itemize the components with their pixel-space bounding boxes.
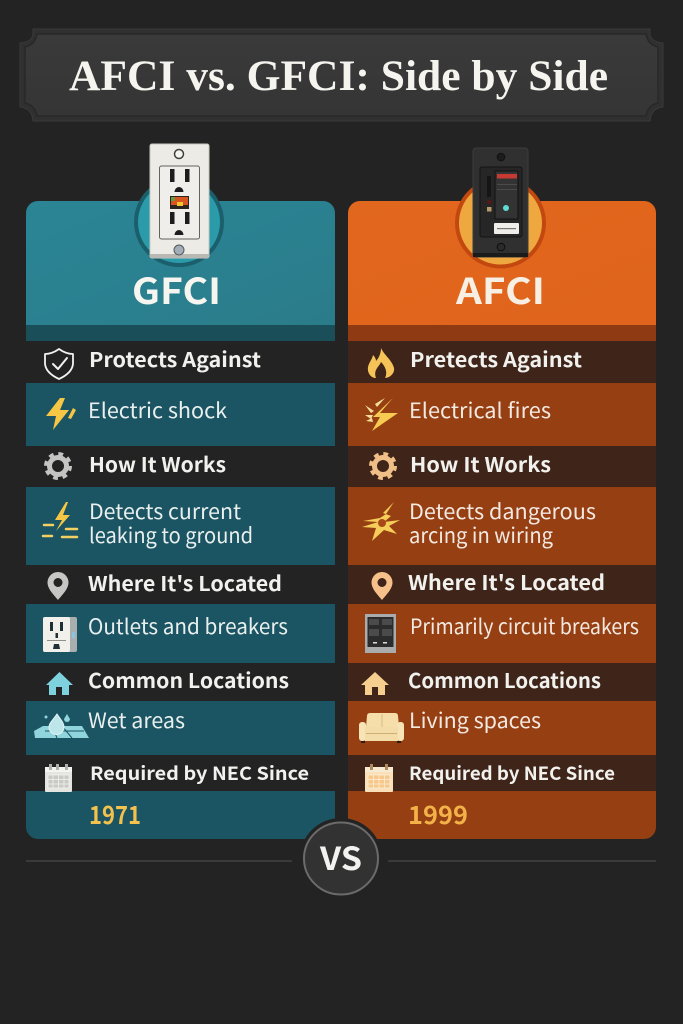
divider line right: [388, 860, 656, 862]
title: AFCI vs. GFCI: Side by Side: [69, 53, 608, 100]
row label: Where It's Located: Where It's Located: [408, 566, 605, 596]
icon: gear: [371, 454, 395, 478]
icon: location pin: [48, 572, 68, 600]
row label: Required by NEC Since: Required by NEC Since: [90, 760, 309, 786]
divider line left: [26, 860, 292, 862]
row text: Outlets and breakers: Outlets and breakers: [88, 611, 288, 641]
icon: AFCI device badge: [457, 148, 544, 266]
icon: location pin: [372, 572, 392, 600]
title plaque: [20, 29, 663, 121]
icon: lightning bolt: [46, 398, 76, 430]
panel: AFCI: [348, 148, 656, 839]
year: 1999: 1999: [408, 796, 468, 832]
heading: AFCI: AFCI: [455, 263, 545, 315]
row text: Detects dangerous arcing in wiring: arcing in wiring: [409, 520, 553, 550]
row label: How It Works: How It Works: [89, 448, 226, 478]
icon: leaking current: [43, 502, 77, 537]
row label: Required by NEC Since: Required by NEC Since: [409, 760, 615, 786]
row text: Detects current leaking to ground: leaking to ground: [89, 520, 253, 550]
row text: Detects current leaking to ground: Detects current: [89, 496, 241, 526]
icon: shield: [45, 349, 73, 379]
row text: Wet areas: Wet areas: [88, 705, 185, 735]
icon: calendar: [45, 764, 72, 792]
icon: breaker panel: [365, 614, 396, 653]
icon: calendar: [365, 764, 393, 792]
icon: sofa: [359, 713, 404, 743]
icon: house: [361, 672, 389, 695]
row text: Detects dangerous arcing in wiring: Detects dangerous: [409, 496, 596, 526]
panel: GFCI: [26, 144, 335, 839]
row text: Electric shock: Electric shock: [88, 395, 227, 425]
icon: outlet: [43, 617, 77, 652]
row label: Common Locations: Common Locations: [408, 664, 601, 694]
row text: Primarily circuit breakers: Primarily circuit breakers: [410, 611, 639, 641]
row text: Electrical fires: Electrical fires: [409, 395, 551, 425]
row text: Living spaces: Living spaces: [409, 705, 541, 735]
VS badge: [300, 818, 382, 898]
icon: flame: [368, 348, 394, 378]
icon: arcing wires: [362, 502, 400, 541]
icon: GFCI outlet badge: [136, 144, 222, 265]
year: 1971: 1971: [89, 796, 141, 832]
heading: GFCI: GFCI: [132, 263, 221, 315]
row label: Where It's Located: Where It's Located: [88, 567, 282, 597]
icon: water on tiles: [34, 714, 89, 738]
row label: How It Works: How It Works: [410, 448, 551, 478]
row label: Common Locations: Common Locations: [88, 664, 289, 694]
icon: house: [46, 672, 73, 695]
icon: gear: [46, 454, 70, 478]
icon: sparking bolt: [365, 398, 398, 431]
VS text: VS: [319, 834, 362, 880]
row label: Protects Against: Protects Against: [89, 343, 261, 373]
row label: Pretects Against: Pretects Against: [410, 343, 582, 373]
